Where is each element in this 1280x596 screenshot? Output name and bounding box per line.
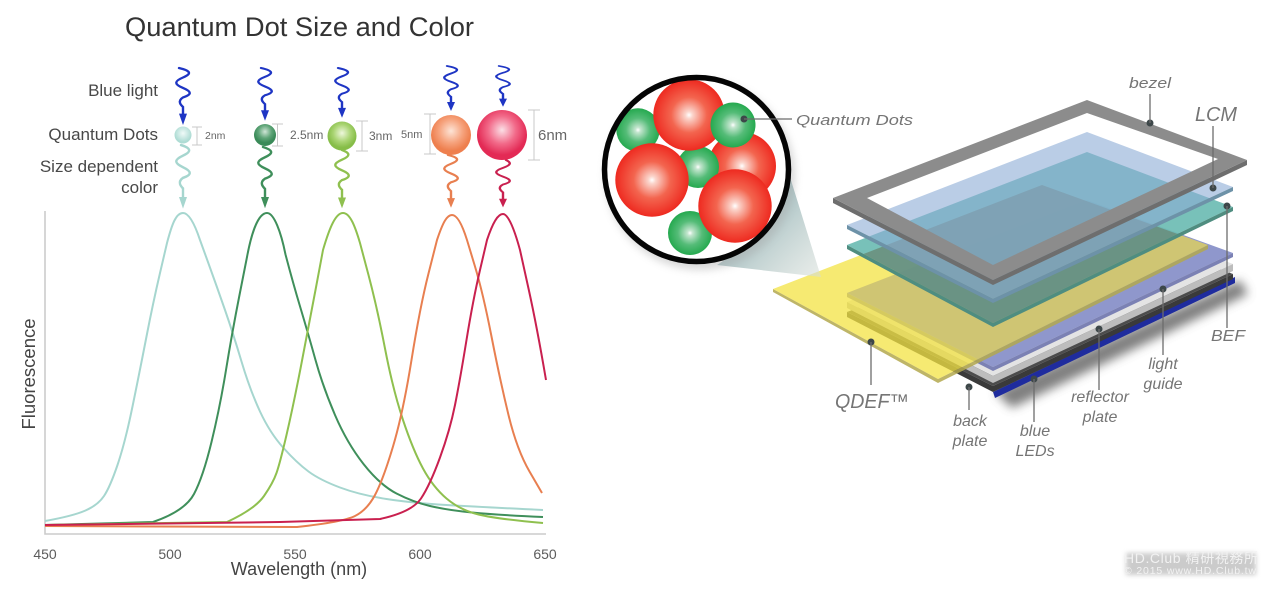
quantum dots with size brackets: 2nm	[205, 130, 226, 142]
x axis numbers: 450	[33, 546, 57, 562]
quantum dot spheres	[615, 79, 776, 255]
magnified quantum dots circle	[604, 78, 795, 270]
blue light arrows	[176, 66, 510, 125]
row labels: Blue light	[88, 81, 158, 100]
label: LCM: LCM	[1195, 104, 1237, 126]
quantum dots with size brackets	[174, 110, 567, 160]
fluorescence chart	[18, 211, 557, 579]
watermark: © 2015 www.HD.Club.tw	[1124, 565, 1256, 577]
curve: 2.5nm	[45, 213, 543, 525]
quantum dots with size brackets: 6nm	[538, 127, 567, 144]
label: blue LEDs: blue	[1020, 423, 1050, 440]
quantum dots with size brackets: 2.5nm	[290, 128, 323, 142]
y axis title: Fluorescence	[18, 318, 39, 430]
quantum dots with size brackets: 3nm	[369, 129, 392, 143]
label: back plate	[952, 384, 988, 450]
label: Quantum Dots	[740, 112, 914, 129]
x axis numbers: 500	[158, 546, 182, 562]
display layer stack	[717, 100, 1248, 408]
label: LCM	[1195, 104, 1237, 192]
curve: 2nm	[45, 213, 543, 521]
layer: light guide	[847, 200, 1233, 371]
layer: reflector plate	[847, 209, 1233, 383]
label: back plate: back	[953, 413, 988, 430]
title: Quantum Dot Size and Color	[125, 12, 474, 42]
label: blue LEDs: LEDs	[1015, 443, 1055, 460]
x axis title: Wavelength (nm)	[231, 559, 367, 579]
curve: 5nm	[45, 215, 542, 527]
label: light guide: light	[1148, 356, 1178, 373]
layer: bezel	[833, 100, 1247, 285]
row labels	[40, 81, 158, 197]
label: bezel	[1129, 75, 1172, 126]
curve: 3nm	[45, 213, 543, 525]
x axis numbers: 650	[533, 546, 557, 562]
label: reflector plate: plate	[1082, 409, 1117, 426]
x axis numbers: 550	[283, 546, 307, 562]
label: reflector plate	[1071, 326, 1130, 426]
lens ring	[604, 78, 788, 262]
row labels: Quantum Dots	[48, 125, 158, 144]
label: reflector plate: reflector	[1071, 389, 1130, 406]
label: back plate: plate	[952, 433, 987, 450]
curve: 6nm	[45, 214, 546, 525]
row labels: Size dependent	[40, 157, 158, 176]
watermark	[1124, 550, 1258, 577]
label: QDEF: QDEF™	[835, 391, 909, 413]
layer: blue LEDs	[993, 277, 1235, 398]
label: blue LEDs	[1015, 376, 1055, 460]
emitted colour arrows	[176, 145, 510, 209]
layer: back plate	[847, 219, 1233, 392]
lens shadow	[605, 80, 795, 270]
layer: BEF film	[847, 152, 1233, 327]
layer: QDEF film	[773, 234, 1208, 383]
label: BEF	[1211, 202, 1246, 345]
row labels: color	[121, 178, 158, 197]
lens background	[604, 78, 788, 262]
label: bezel: bezel	[1129, 75, 1172, 92]
layer: LCM panel	[847, 132, 1233, 303]
label: QDEF	[835, 338, 909, 413]
x axis numbers	[33, 546, 557, 562]
label: Quantum Dots: Quantum Dots	[796, 112, 914, 129]
label: BEF: BEF	[1211, 328, 1246, 345]
watermark: HD.Club 精研視務所	[1124, 550, 1258, 566]
label: light guide	[1143, 286, 1183, 393]
magnifier cone	[717, 177, 821, 277]
quantum dots with size brackets: 5nm	[401, 129, 422, 141]
chart axes	[45, 211, 546, 534]
drop shadow	[995, 280, 1248, 408]
x axis numbers: 600	[408, 546, 432, 562]
label: light guide: guide	[1143, 376, 1183, 393]
